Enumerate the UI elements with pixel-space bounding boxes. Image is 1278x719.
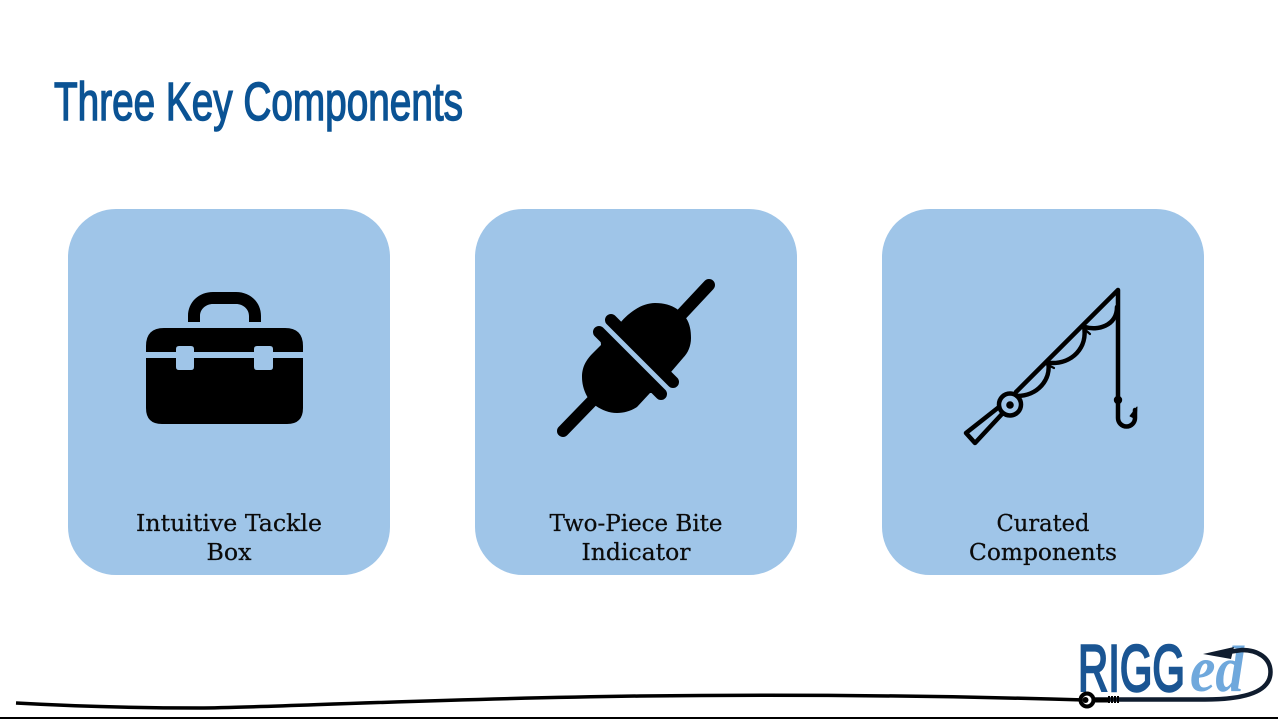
icon: tackle box [146,292,303,424]
caption: intuitive tackle box: Box [206,540,252,566]
logo: RIGGed [1078,631,1270,706]
icon: two-piece bite indicator [563,285,709,431]
caption: curated components: Curated [996,511,1090,537]
icon: fishing rod [966,290,1137,443]
logo wordmark: ed: ed [1190,633,1245,706]
caption: intuitive tackle box: Intuitive Tackle [136,511,322,537]
footer rule [0,717,1278,719]
panel: two-piece bite indicator [475,209,797,575]
panel: intuitive tackle box [68,209,390,575]
logo hook [1080,647,1270,706]
title: Three Key Components [54,72,463,132]
caption: curated components: Components [969,540,1117,566]
logo wordmark: RIGG: RIGG [1078,631,1185,705]
caption: two-piece bite indicator: Two-Piece Bite [550,511,722,537]
caption: two-piece bite indicator: Indicator [582,540,691,566]
panel: curated components [882,209,1204,575]
footer fishing line [16,695,1085,708]
